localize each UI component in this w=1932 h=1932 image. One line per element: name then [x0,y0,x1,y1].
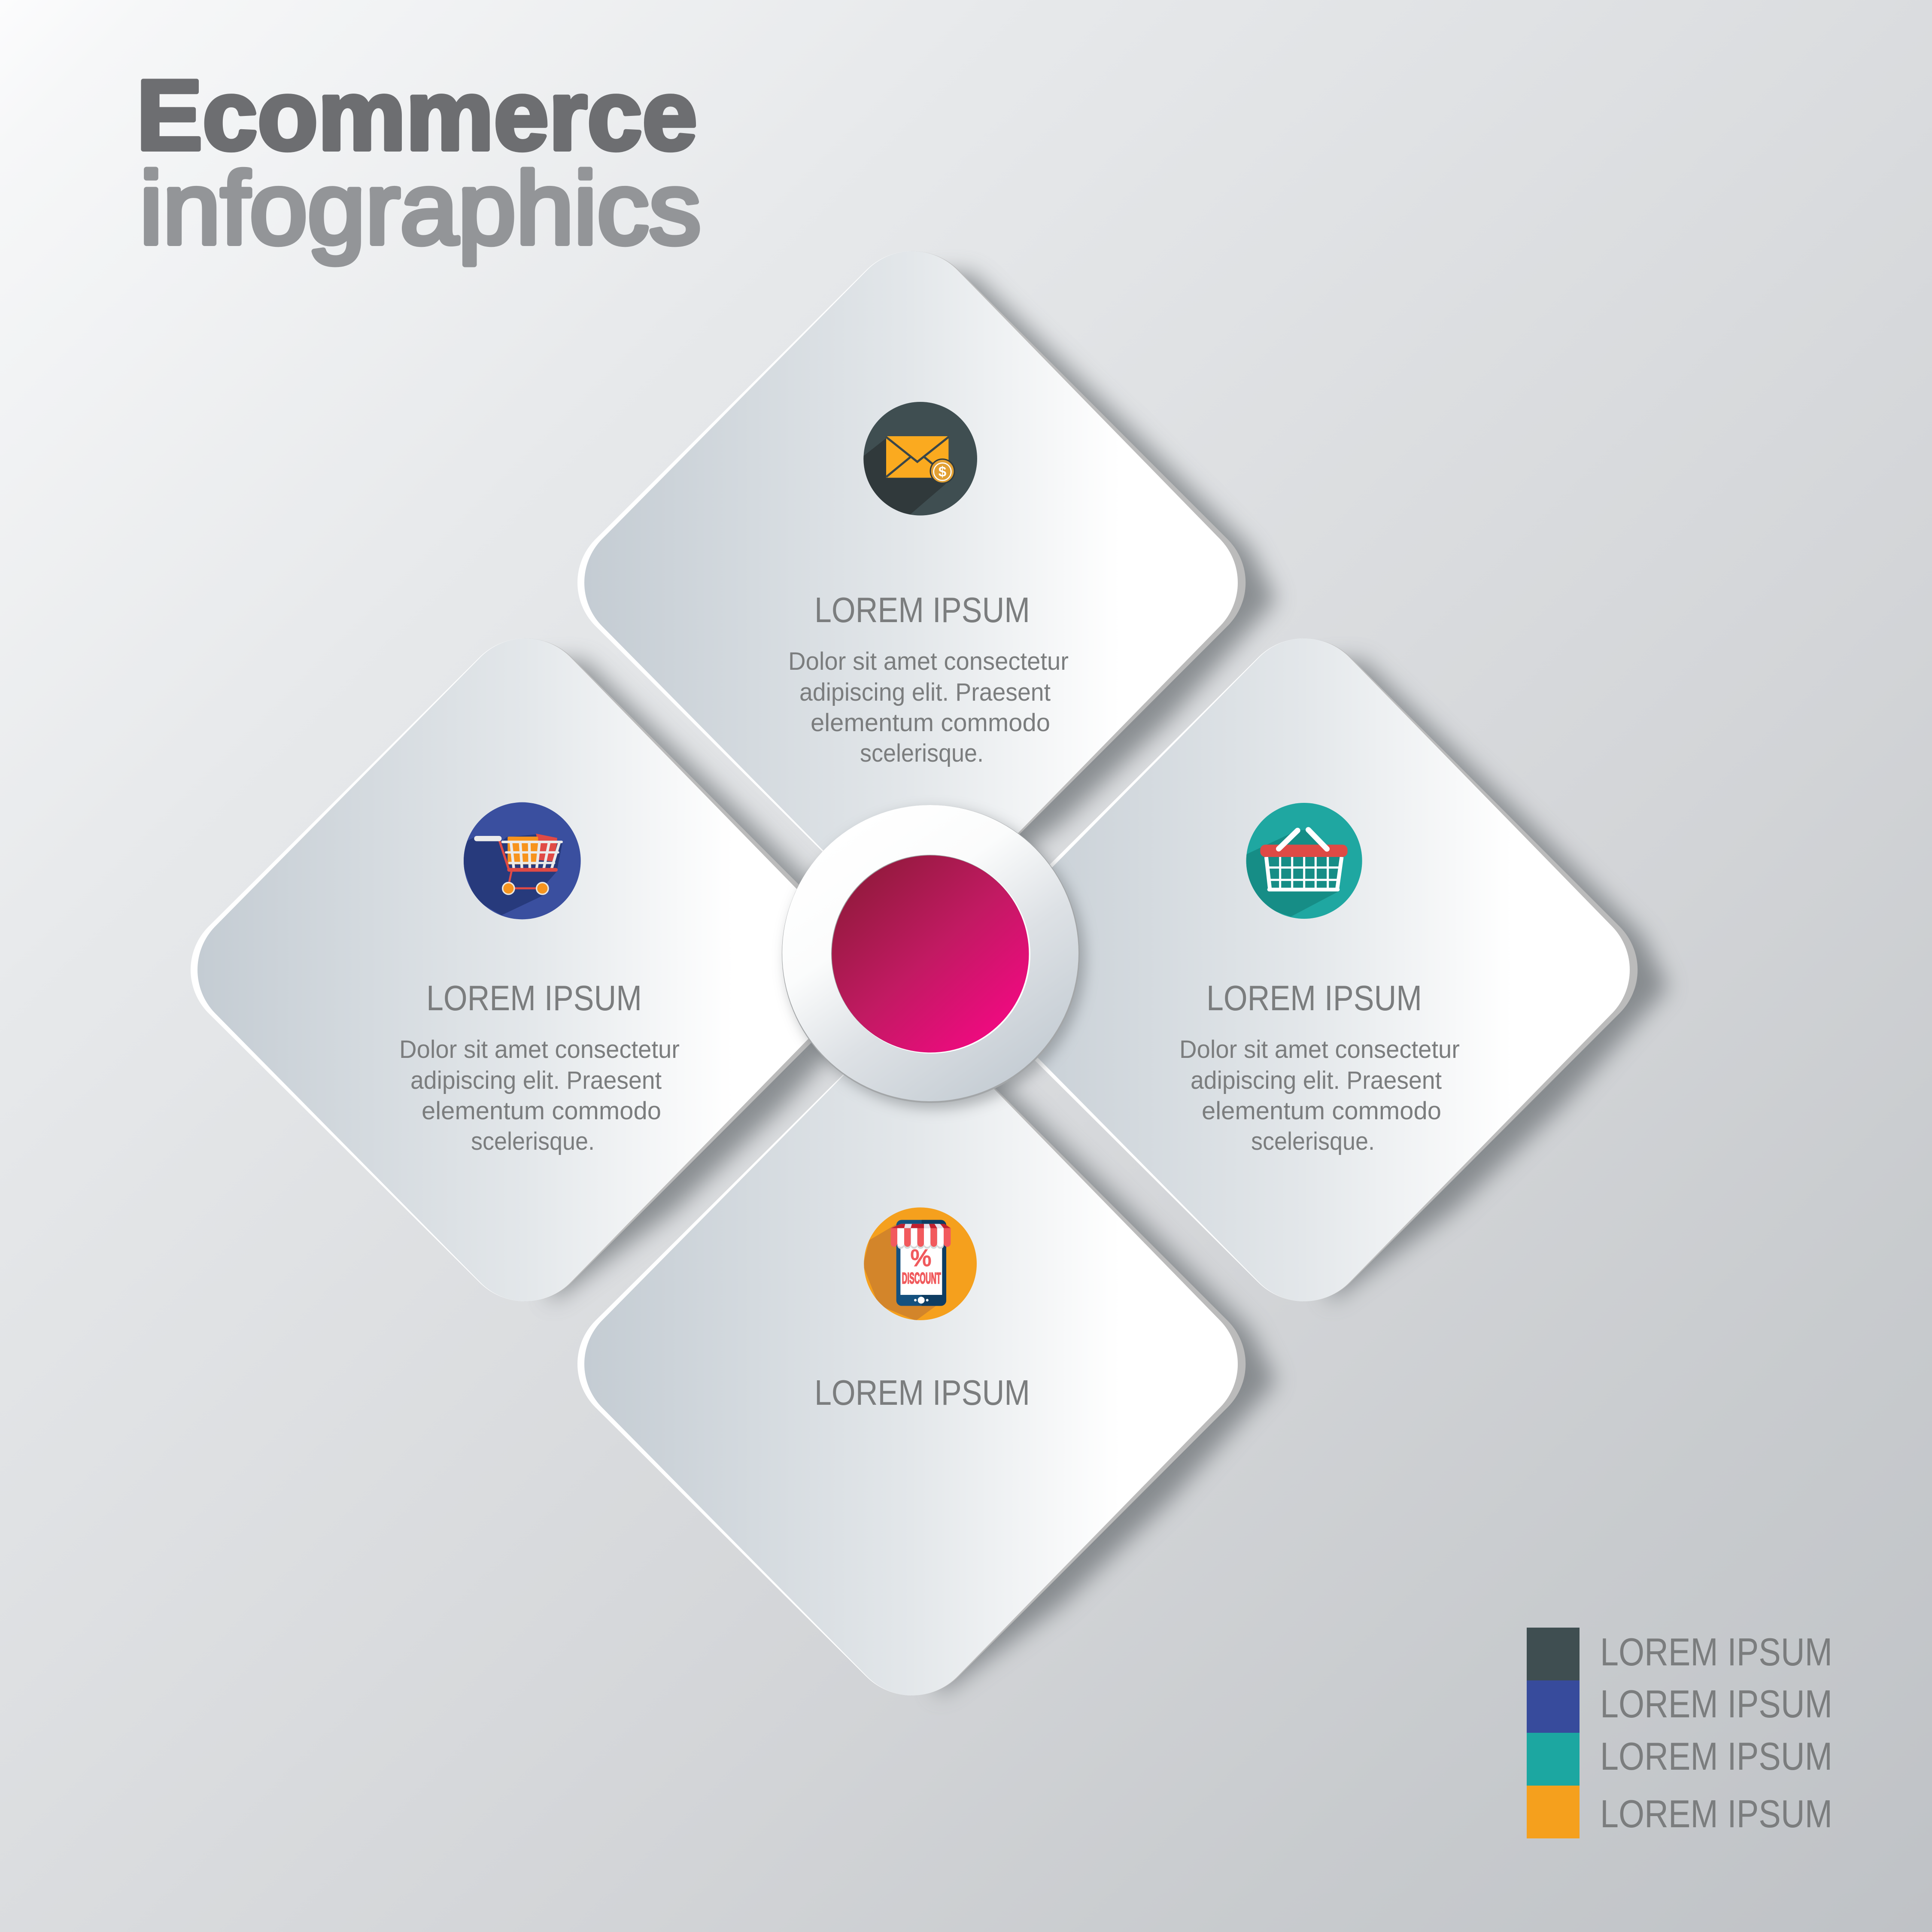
panel: bottom diamond [577,1033,1276,1697]
title [137,60,701,265]
left body text [399,1036,680,1155]
legend label 2: LOREM IPSUM [1600,1683,1832,1726]
center pink circle [832,855,1029,1053]
left body text: adipiscing elit. Praesent [410,1066,662,1094]
left body text: scelerisque. [471,1127,595,1155]
legend label 1: LOREM IPSUM [1600,1631,1832,1674]
right body text: Dolor sit amet consectetur [1179,1036,1460,1063]
top body text: Dolor sit amet consectetur [788,647,1069,675]
bottom diamond shape [577,1033,1276,1697]
awning [891,1224,951,1249]
legend swatch: orange [1527,1786,1580,1838]
icon: phone storefront discount [863,1207,977,1321]
bottom heading: LOREM IPSUM [814,1373,1030,1413]
legend label 3: LOREM IPSUM [1600,1735,1832,1778]
right body text: elementum commodo [1202,1097,1441,1125]
right body text: scelerisque. [1251,1127,1375,1155]
icon: phone storefront discount: DISCOUNT [902,1269,941,1287]
icon: shopping cart [461,802,581,919]
left diamond shape [190,638,889,1303]
top body text [788,647,1069,767]
title line: Ecommerce: Ecommerce [137,60,697,171]
right body text [1179,1036,1460,1155]
legend swatch: slate [1527,1628,1580,1680]
title line: infographics: infographics [140,152,701,265]
icon: shopping basket [1242,803,1362,919]
left heading: LOREM IPSUM [426,978,642,1018]
right body text: adipiscing elit. Praesent [1191,1066,1442,1094]
legend label 4: LOREM IPSUM [1600,1792,1832,1836]
top heading: LOREM IPSUM [814,590,1030,630]
legend swatch: teal [1527,1733,1580,1786]
panel: right diamond [969,638,1668,1303]
top body text: adipiscing elit. Praesent [799,678,1051,706]
panel: left diamond [190,638,889,1303]
top body text: elementum commodo [811,709,1050,737]
top body text: scelerisque. [860,739,984,767]
left body text: Dolor sit amet consectetur [399,1036,680,1063]
icon: envelope with dollar coin [859,402,977,516]
right diamond shape [969,638,1668,1303]
center medallion [782,805,1085,1109]
left body text: elementum commodo [422,1097,661,1125]
icon: envelope with dollar coin: $ [939,464,947,480]
legend [1527,1628,1832,1838]
icon: phone storefront discount: % [911,1244,931,1271]
panel: top diamond [577,251,1276,915]
right heading: LOREM IPSUM [1206,978,1422,1018]
legend swatch: blue [1527,1680,1580,1733]
top diamond shape [577,251,1276,915]
